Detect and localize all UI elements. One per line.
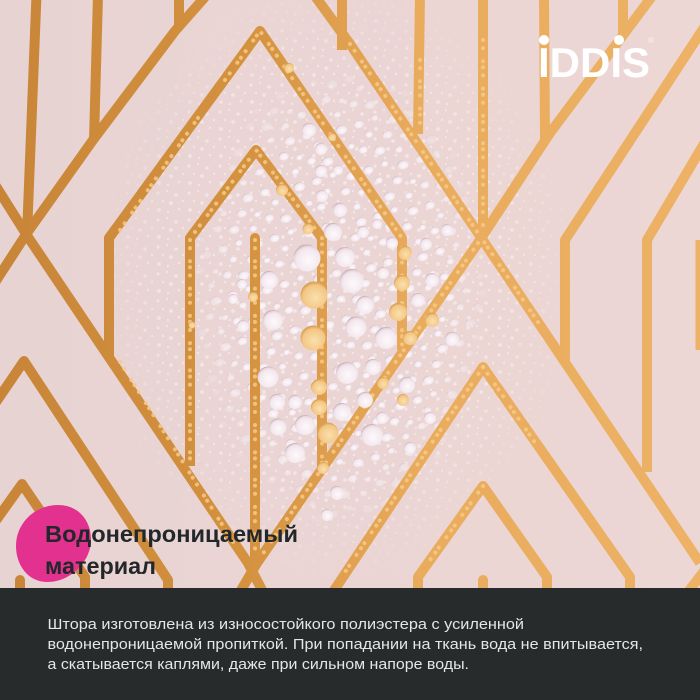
droplets on gold lines (120, 31, 540, 572)
droplets resting on gold (188, 63, 439, 474)
dark text panel (0, 588, 700, 700)
description text (48, 616, 643, 673)
clear droplets (228, 123, 459, 521)
medium droplet texture (202, 76, 480, 510)
description line 2: водонепроницаемой пропиткой. При попадании на ткань вода не впитывается, (48, 636, 643, 653)
fine droplets on fabric (126, 19, 544, 542)
large water droplets (188, 63, 459, 521)
logo dots (539, 35, 624, 45)
logo wordmark: IDDIS (538, 39, 650, 86)
heading (45, 521, 298, 579)
description line 3: а скатывается каплями, даже при сильном напоре воды. (48, 656, 469, 673)
tiny droplet texture (126, 19, 544, 542)
pink accent blob (16, 505, 91, 582)
registered mark: ® (648, 36, 654, 45)
heading line 2: материал (45, 553, 156, 579)
logo: iDDIS (538, 35, 654, 86)
heading line 1: Водонепроницаемый (45, 521, 298, 547)
description line 1: Штора изготовлена из износостойкого полиэстера с усиленной (48, 616, 524, 633)
